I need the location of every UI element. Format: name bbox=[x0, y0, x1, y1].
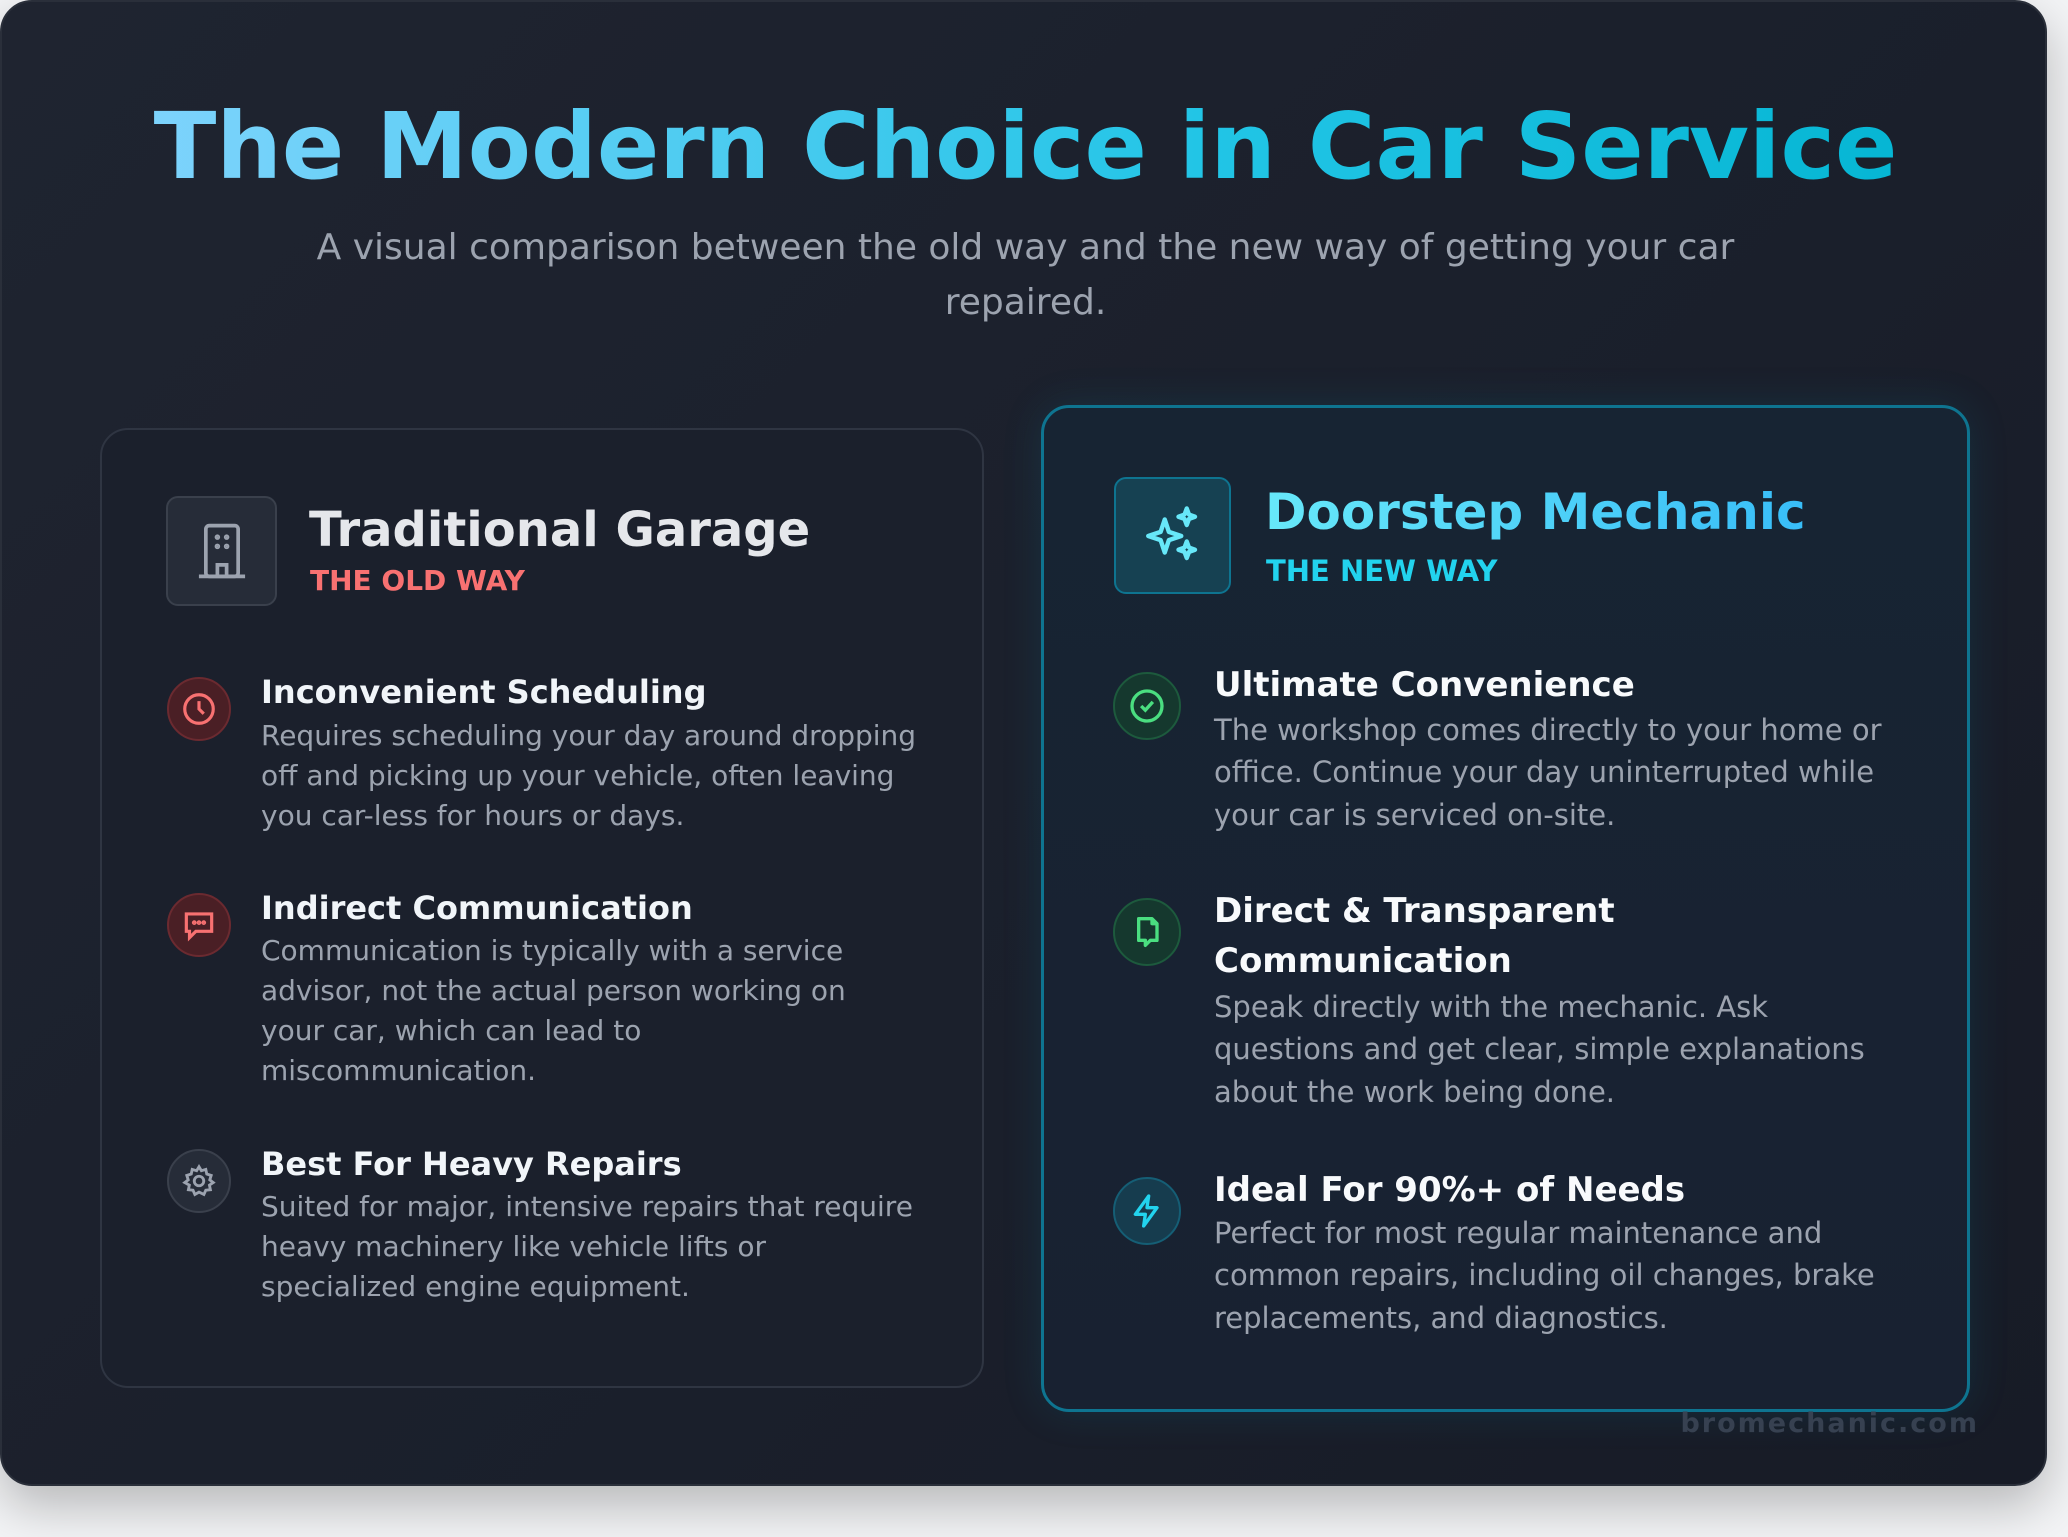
item: convenience bbox=[1113, 665, 1882, 832]
item: communication: Communication is typically with a service bbox=[261, 934, 843, 967]
label: the new way: THE NEW WAY bbox=[1266, 554, 1497, 588]
subtitle: repaired. bbox=[945, 282, 1106, 323]
item: scheduling: off and picking up your vehicle, often leaving bbox=[261, 759, 894, 792]
item: scheduling: Inconvenient Scheduling bbox=[261, 673, 706, 711]
item: direct communication: about the work being done. bbox=[1214, 1075, 1615, 1109]
item: heavy repairs: Best For Heavy Repairs bbox=[261, 1145, 682, 1183]
item: communication bbox=[167, 889, 846, 1087]
icon: chat bbox=[167, 893, 231, 957]
icon: clock bbox=[167, 677, 231, 741]
item: direct communication: Speak directly with the mechanic. Ask bbox=[1214, 990, 1768, 1024]
item: communication: your car, which can lead to bbox=[261, 1014, 641, 1047]
item: heavy repairs: heavy machinery like vehicle lifts or bbox=[261, 1230, 766, 1263]
icon: lightning bbox=[1113, 1177, 1181, 1245]
panel: traditional garage bbox=[100, 428, 984, 1388]
item: heavy repairs bbox=[167, 1145, 913, 1303]
item: communication: Indirect Communication bbox=[261, 889, 693, 927]
icon: check bbox=[1113, 672, 1181, 740]
item: ideal for needs bbox=[1113, 1170, 1875, 1335]
subtitle bbox=[317, 227, 1734, 323]
item: convenience: Ultimate Convenience bbox=[1214, 665, 1635, 705]
heading: traditional garage: Traditional Garage bbox=[309, 502, 810, 558]
icon: gear bbox=[167, 1149, 231, 1213]
item: scheduling: Requires scheduling your day around dropping bbox=[261, 719, 916, 752]
watermark: bromechanic.com bbox=[1680, 1408, 1979, 1439]
item: direct communication: Direct & Transparent bbox=[1214, 891, 1615, 931]
icon: building bbox=[166, 496, 277, 606]
title: The Modern Choice in Car Service bbox=[154, 93, 1897, 200]
item: direct communication bbox=[1113, 891, 1865, 1109]
item: communication: miscommunication. bbox=[261, 1054, 536, 1087]
item: direct communication: Communication bbox=[1214, 941, 1512, 981]
item: heavy repairs: specialized engine equipment. bbox=[261, 1270, 690, 1303]
item: convenience: The workshop comes directly to your home or bbox=[1214, 713, 1882, 747]
item: convenience: office. Continue your day uninterrupted while bbox=[1214, 755, 1874, 789]
item: communication: advisor, not the actual person working on bbox=[261, 974, 846, 1007]
item: ideal for needs: replacements, and diagnostics. bbox=[1214, 1301, 1668, 1335]
subtitle: A visual comparison between the old way and the new way of getting your car bbox=[317, 227, 1734, 268]
label: the old way: THE OLD WAY bbox=[310, 564, 525, 597]
item: scheduling bbox=[167, 673, 916, 832]
item: heavy repairs: Suited for major, intensive repairs that require bbox=[261, 1190, 913, 1223]
item: ideal for needs: common repairs, including oil changes, brake bbox=[1214, 1258, 1875, 1292]
item: ideal for needs: Perfect for most regular maintenance and bbox=[1214, 1216, 1822, 1250]
heading: doorstep mechanic: Doorstep Mechanic bbox=[1265, 483, 1806, 541]
item: convenience: your car is serviced on-site. bbox=[1214, 798, 1615, 832]
item: ideal for needs: Ideal For 90%+ of Needs bbox=[1214, 1170, 1685, 1210]
item: scheduling: you car-less for hours or days. bbox=[261, 799, 684, 832]
panel: doorstep mechanic bbox=[1041, 405, 1970, 1412]
icon: chat green bbox=[1113, 898, 1181, 966]
item: direct communication: questions and get clear, simple explanations bbox=[1214, 1032, 1865, 1066]
icon: sparkles bbox=[1114, 477, 1231, 594]
